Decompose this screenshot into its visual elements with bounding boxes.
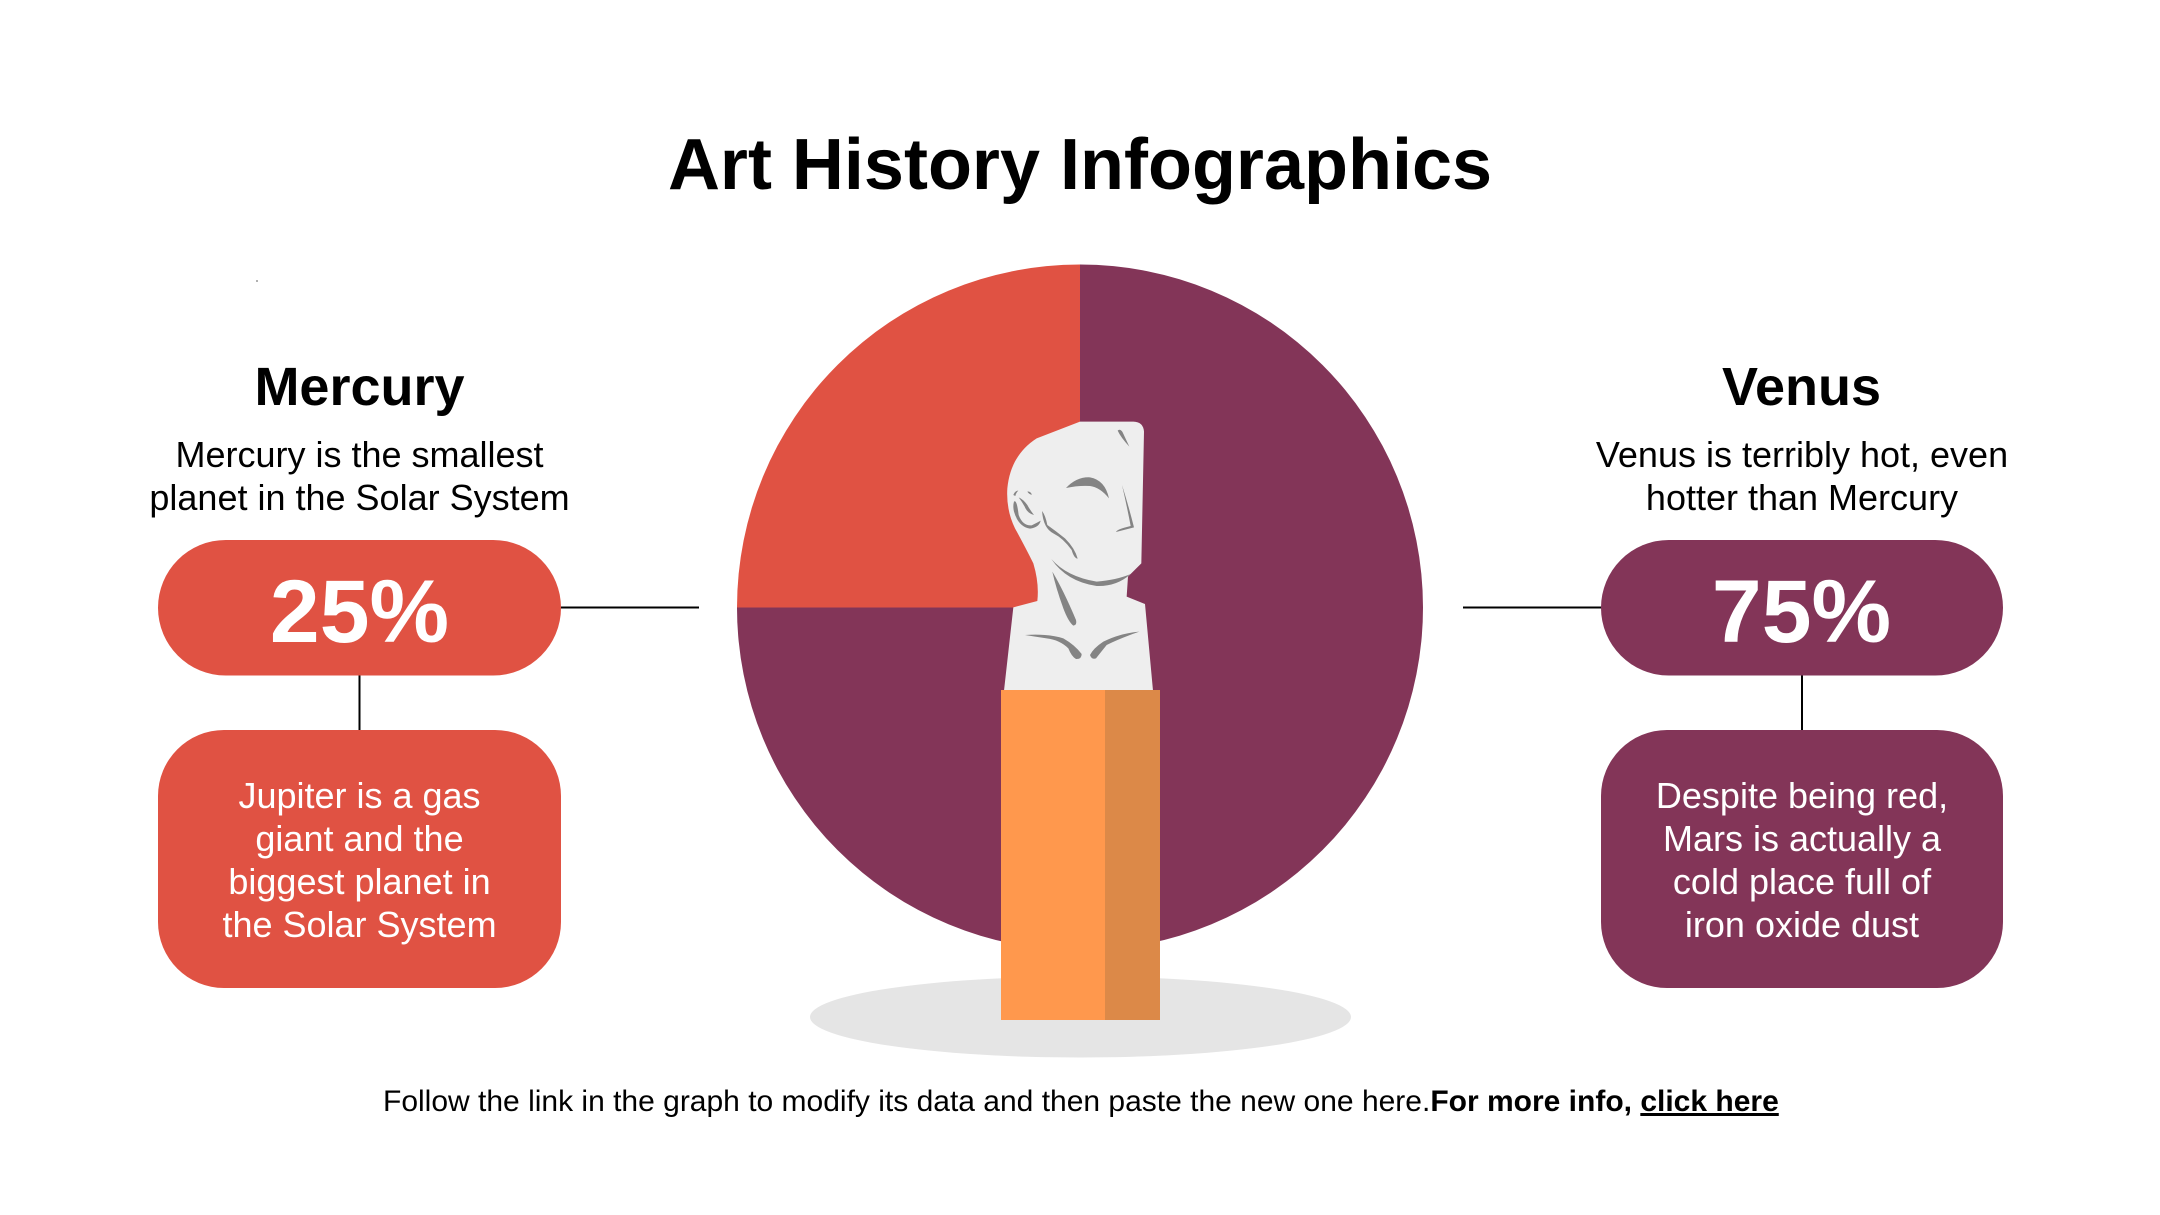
box: Mars text (1601, 730, 2003, 988)
text: Mercury description: Mercury is the smallest (175, 434, 544, 475)
title: Art History Infographics (668, 125, 1492, 205)
footer note: Follow the link in the graph to modify its data and then paste the new one here.For more info, click here (383, 1085, 1779, 1118)
pill: 25%: 25% (270, 561, 449, 661)
connector: Mercury pill to box (358, 675, 360, 731)
text: Venus description: Venus is terribly hot, even (1596, 434, 2008, 475)
box: Mars text: Mars is actually a (1663, 818, 1942, 859)
box: Jupiter text (158, 730, 561, 988)
pie chart with bust (737, 264, 1423, 1058)
icon: classical bust (1004, 422, 1153, 691)
panel: Venus (1463, 357, 2008, 988)
connector: Mercury to pie (561, 606, 699, 608)
pie slice: 25% (737, 264, 1080, 608)
pedestal (1001, 690, 1160, 1020)
small stray dot (256, 280, 258, 282)
box: Mars text: Despite being red, (1656, 775, 1948, 816)
panel: Mercury (149, 357, 699, 988)
heading: Venus: Venus (1722, 357, 1881, 417)
floor shadow (810, 976, 1351, 1058)
box: Jupiter text: biggest planet in (228, 861, 491, 902)
box: Mars text: iron oxide dust (1685, 904, 1919, 945)
pill: 75%: 75% (1712, 561, 1891, 661)
connector: pie to Venus (1463, 606, 1602, 608)
pill: 75% (1601, 540, 2003, 676)
text: Mercury description: planet in the Solar System (149, 477, 570, 518)
box: Mars text: cold place full of (1673, 861, 1932, 902)
box: Jupiter text: the Solar System (222, 904, 497, 945)
box: Jupiter text: giant and the (255, 818, 464, 859)
connector: Venus pill to box (1801, 675, 1803, 731)
box: Jupiter text: Jupiter is a gas (238, 775, 481, 816)
pill: 25% (158, 540, 561, 676)
heading: Mercury: Mercury (254, 357, 465, 417)
pie slice: 75% (737, 264, 1423, 951)
text: Venus description: hotter than Mercury (1646, 477, 1958, 518)
